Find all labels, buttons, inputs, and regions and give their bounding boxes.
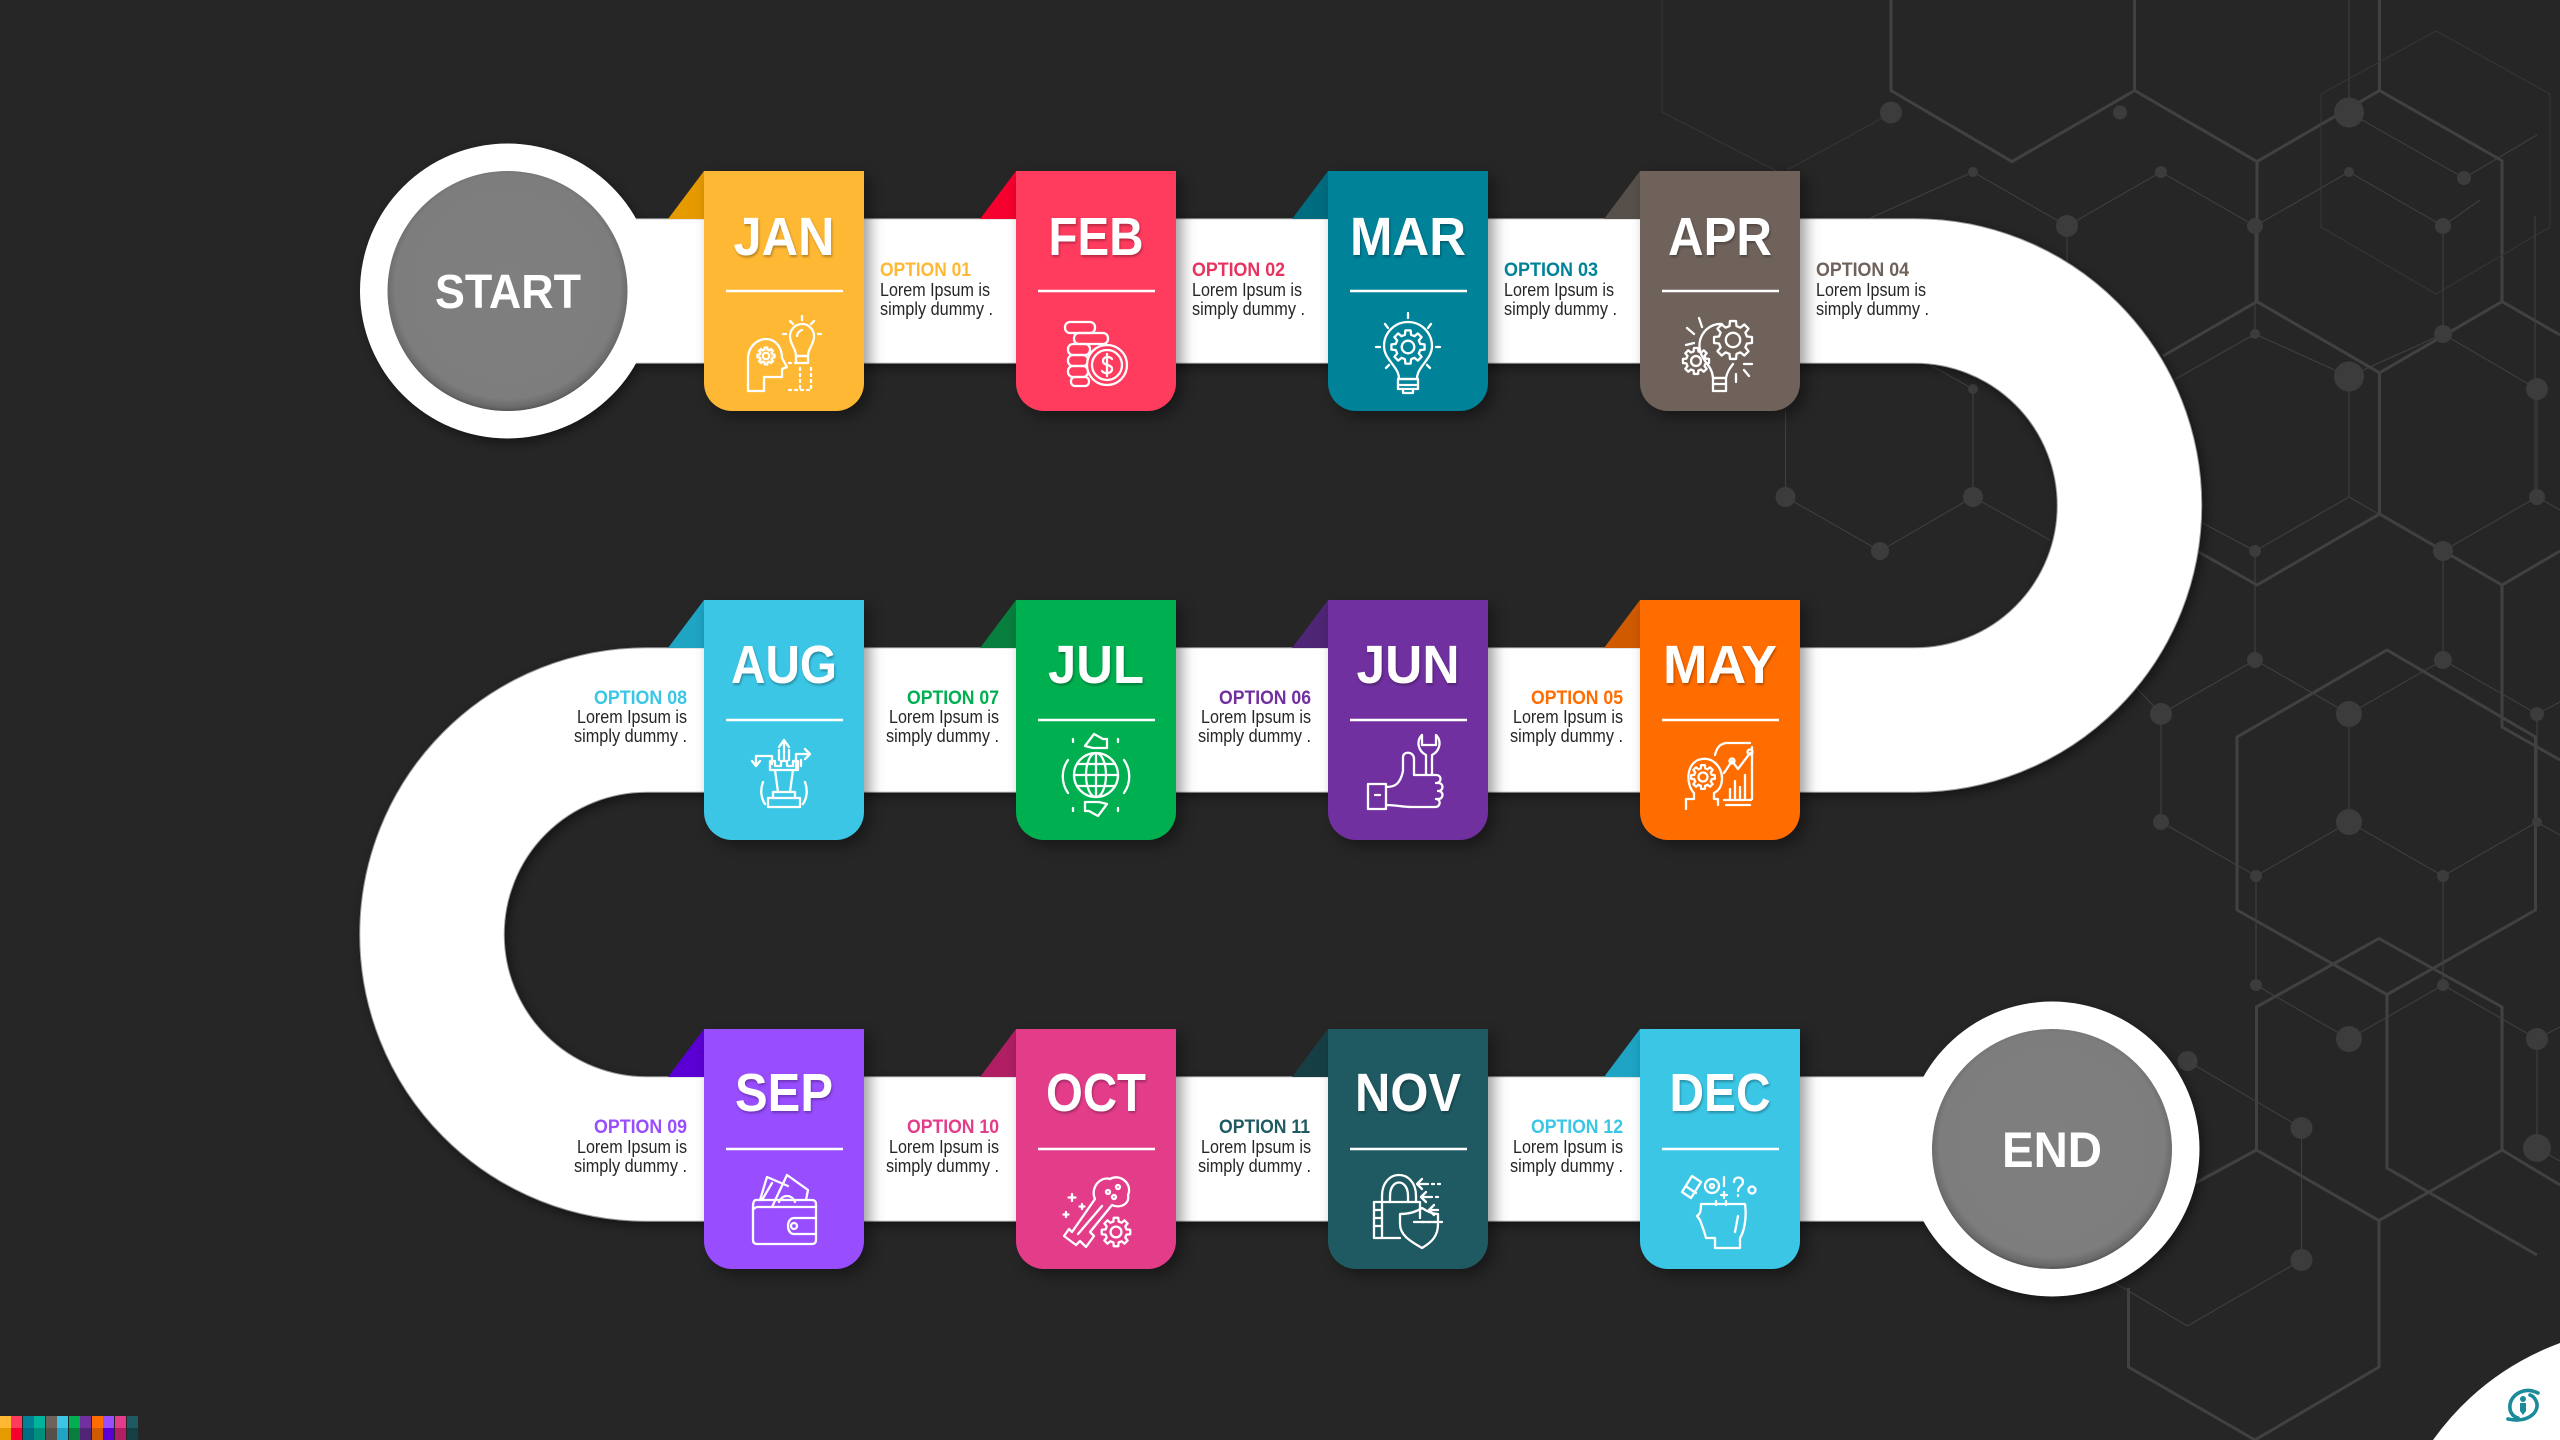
text: option 04: simply dummy . <box>1816 299 1929 319</box>
text: option 07: simply dummy . <box>886 726 999 746</box>
icon: coins <box>1065 322 1127 386</box>
text: option 06: simply dummy . <box>1198 726 1311 746</box>
text: option 12: simply dummy . <box>1510 1156 1623 1176</box>
step: October <box>886 1029 1176 1269</box>
card: NOV: NOV <box>1355 1063 1461 1123</box>
text: option 06: OPTION 06 <box>1219 688 1311 709</box>
text: option 07 <box>886 688 999 746</box>
end badge: END <box>2002 1122 2102 1178</box>
step: December <box>1510 1029 1800 1269</box>
text: option 12: Lorem Ipsum is <box>1513 1137 1623 1157</box>
background: hexagon network <box>1662 0 2560 1440</box>
card: FEB: FEB <box>1048 207 1144 267</box>
icon: bulb with two gears <box>1683 318 1752 391</box>
card: SEP: SEP <box>735 1063 833 1123</box>
text: option 01: Lorem Ipsum is <box>880 280 990 300</box>
text: option 01 <box>880 260 993 319</box>
card: APR <box>1604 171 1800 411</box>
text: option 05: Lorem Ipsum is <box>1513 707 1623 727</box>
start badge <box>388 171 628 411</box>
card: DEC: DEC <box>1670 1063 1770 1123</box>
text: option 03 <box>1504 260 1617 319</box>
step: July <box>886 600 1176 840</box>
winding white road with end rings <box>360 144 2200 1296</box>
icon: head with gear and chart <box>1686 743 1752 809</box>
text: option 05: OPTION 05 <box>1531 688 1623 709</box>
card: DEC <box>1604 1029 1800 1269</box>
card: OCT: OCT <box>1046 1063 1146 1123</box>
step: February <box>980 171 1305 411</box>
card: JUL <box>980 600 1176 840</box>
text: option 11: Lorem Ipsum is <box>1201 1137 1311 1157</box>
text: option 02: simply dummy . <box>1192 299 1305 319</box>
text: option 09: simply dummy . <box>574 1156 687 1176</box>
text: option 10: Lorem Ipsum is <box>889 1137 999 1157</box>
icon: head with question marks <box>1682 1176 1756 1248</box>
text: option 08 <box>574 688 687 746</box>
text: option 01: simply dummy . <box>880 299 993 319</box>
corner logo <box>2433 1343 2560 1440</box>
card: OCT <box>980 1029 1176 1269</box>
colour palette strip <box>0 1416 138 1440</box>
card: SEP <box>668 1029 864 1269</box>
card: JUN: JUN <box>1356 635 1460 695</box>
text: option 03: simply dummy . <box>1504 299 1617 319</box>
card: NOV <box>1292 1029 1488 1269</box>
icon: chess rook with arrows <box>752 740 810 807</box>
step: March <box>1292 171 1617 411</box>
card: FEB <box>980 171 1176 411</box>
text: option 04: Lorem Ipsum is <box>1816 280 1926 300</box>
card: APR: APR <box>1668 207 1772 267</box>
icon: key and gear <box>1064 1177 1130 1247</box>
text: option 02: OPTION 02 <box>1192 260 1285 281</box>
text: option 01: OPTION 01 <box>880 260 971 281</box>
icon: wallet with banknotes <box>753 1175 816 1244</box>
text: option 07: Lorem Ipsum is <box>889 707 999 727</box>
card: JAN: JAN <box>734 207 834 267</box>
text: option 07: OPTION 07 <box>907 688 999 709</box>
card: MAR <box>1292 171 1488 411</box>
start badge: START <box>435 266 581 319</box>
icon: head and light bulb <box>748 316 821 391</box>
text: option 12 <box>1510 1117 1623 1176</box>
text: option 02 <box>1192 260 1305 319</box>
card: MAR: MAR <box>1350 207 1466 267</box>
text: option 09 <box>574 1117 687 1176</box>
text: option 10: OPTION 10 <box>907 1117 999 1138</box>
text: option 11: simply dummy . <box>1198 1156 1311 1176</box>
step: May <box>1510 600 1800 840</box>
text: option 08: OPTION 08 <box>594 688 687 709</box>
text: option 04 <box>1816 260 1929 319</box>
text: option 11: OPTION 11 <box>1219 1117 1310 1138</box>
icon: globe with hands <box>1063 734 1129 816</box>
text: option 10: simply dummy . <box>886 1156 999 1176</box>
text: option 09: OPTION 09 <box>594 1117 687 1138</box>
text: option 12: OPTION 12 <box>1531 1117 1623 1138</box>
card: AUG: AUG <box>731 635 837 695</box>
card: MAY: MAY <box>1663 635 1777 695</box>
card: JUL: JUL <box>1048 635 1144 695</box>
step: January <box>668 171 993 411</box>
icon: bulb with gear <box>1376 313 1440 393</box>
icon: thumbs up with wrench <box>1368 735 1442 809</box>
card: JUN <box>1292 600 1488 840</box>
text: option 06 <box>1198 688 1311 746</box>
step: September <box>574 1029 864 1269</box>
step: November <box>1198 1029 1488 1269</box>
card: JAN <box>668 171 864 411</box>
text: option 05 <box>1510 688 1623 746</box>
text: option 02: Lorem Ipsum is <box>1192 280 1302 300</box>
icon: padlock and shield <box>1374 1175 1444 1248</box>
step: April <box>1604 171 1929 411</box>
text: option 06: Lorem Ipsum is <box>1201 707 1311 727</box>
text: option 03: OPTION 03 <box>1504 260 1598 281</box>
end badge <box>1932 1029 2172 1269</box>
card: AUG <box>668 600 864 840</box>
card: MAY <box>1604 600 1800 840</box>
text: option 08: Lorem Ipsum is <box>577 707 687 727</box>
text: option 08: simply dummy . <box>574 726 687 746</box>
text: option 05: simply dummy . <box>1510 726 1623 746</box>
text: option 04: OPTION 04 <box>1816 260 1909 281</box>
text: option 03: Lorem Ipsum is <box>1504 280 1614 300</box>
text: option 10 <box>886 1117 999 1176</box>
text: option 11 <box>1198 1117 1311 1176</box>
step: June <box>1198 600 1488 840</box>
step: August <box>574 600 864 840</box>
text: option 09: Lorem Ipsum is <box>577 1137 687 1157</box>
